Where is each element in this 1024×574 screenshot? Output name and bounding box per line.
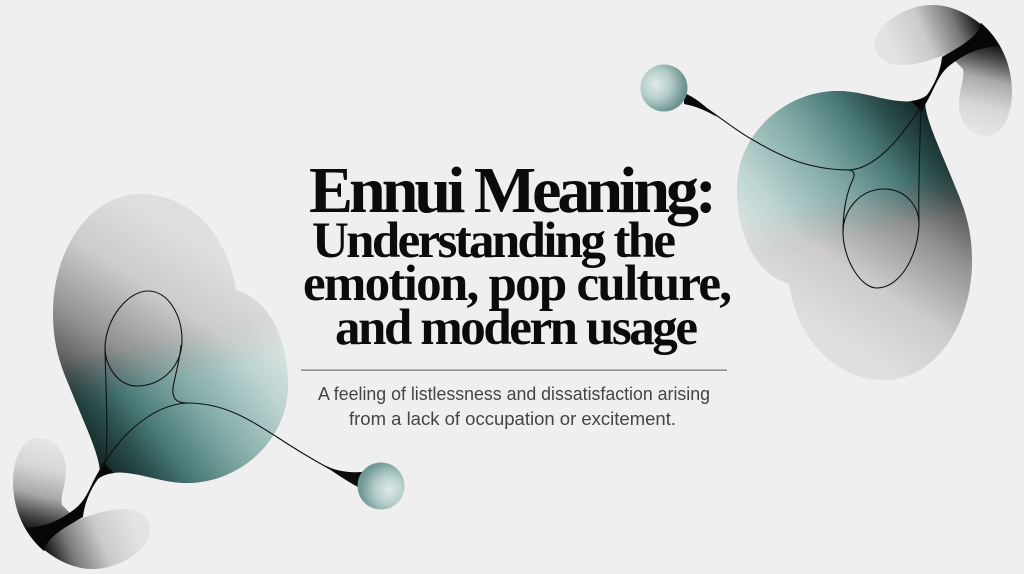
- right main blob: [737, 91, 972, 380]
- right lower lobe: [955, 23, 1012, 136]
- illustration: left organic form: [13, 194, 404, 569]
- left upper lobe: [13, 438, 70, 551]
- right upper lobe: [875, 5, 995, 65]
- title line 3: emotion, pop culture,: [303, 256, 732, 312]
- illustration: right organic form: [640, 5, 1012, 380]
- divider rule: [301, 370, 727, 371]
- subtitle: [318, 384, 710, 429]
- left black stem: [26, 462, 114, 551]
- left lower lobe: [30, 509, 150, 569]
- left loop and threads: [100, 291, 330, 472]
- right sphere: [640, 64, 688, 112]
- right loop and threads: [700, 99, 925, 288]
- title line 4: and modern usage: [335, 300, 698, 356]
- left main blob: [53, 194, 288, 483]
- title: [303, 154, 732, 356]
- left sphere: [358, 462, 404, 510]
- subtitle line 2: from a lack of occupation or excitement.: [349, 409, 676, 429]
- title line 1: Ennui Meaning:: [309, 154, 717, 227]
- left thread taper: [322, 464, 362, 488]
- right black stem: [911, 23, 999, 112]
- title line 2: Understanding the: [312, 213, 676, 269]
- right thread taper: [684, 93, 717, 117]
- subtitle line 1: A feeling of listlessness and dissatisfaction arising: [318, 384, 710, 404]
